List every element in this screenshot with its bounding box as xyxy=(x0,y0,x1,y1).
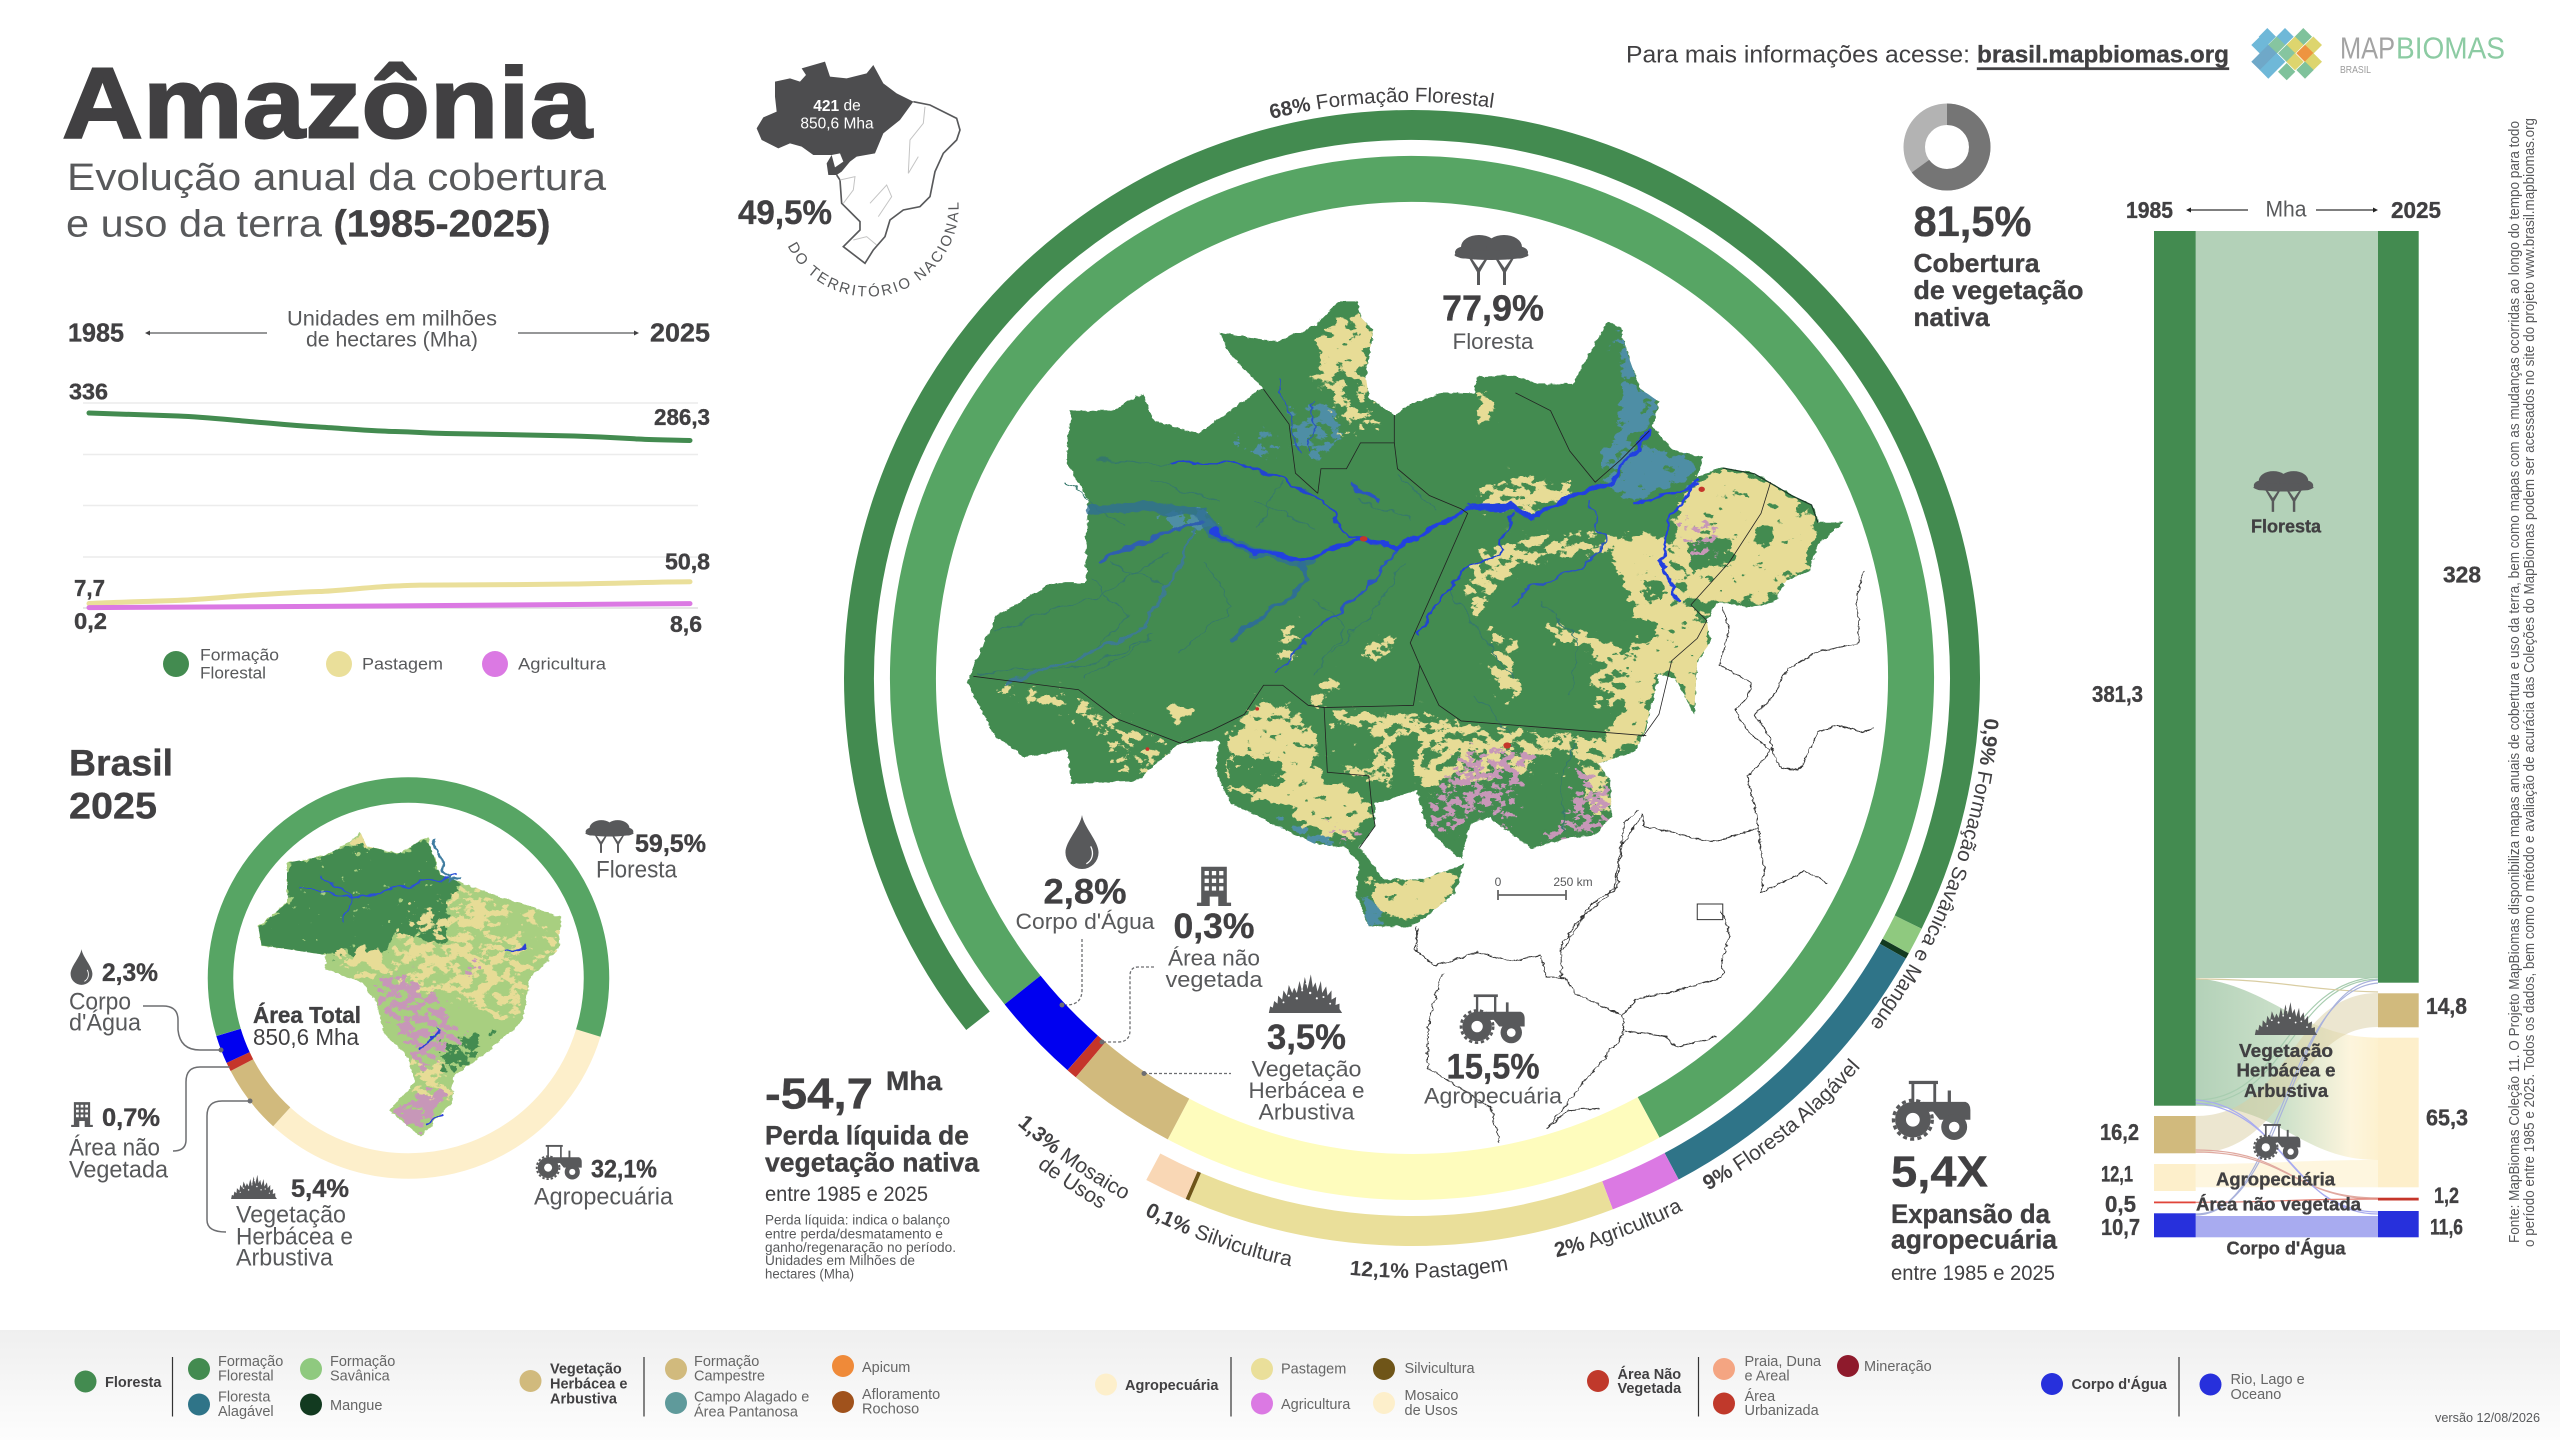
ring label: floresta alagável: 9% Floresta Alagável xyxy=(1703,1058,1860,1189)
urban spots xyxy=(1146,487,1705,751)
center label xyxy=(253,1001,361,1050)
title block xyxy=(62,48,607,246)
stat caption: de vegetação xyxy=(1914,275,2084,305)
legend group: área não vegetada: Mineração xyxy=(1864,1359,1932,1375)
callout: floresta xyxy=(585,820,706,884)
sankey 2025 bars xyxy=(2378,231,2419,1237)
legend group: vegetação herbácea: Formação xyxy=(694,1354,759,1370)
callout: vegetação herbácea: Herbácea e xyxy=(236,1224,353,1250)
callout: corpo d'água: d'Água xyxy=(69,1010,142,1036)
callout: perda líquida: Perda líquida de xyxy=(765,1120,969,1150)
callout: agropecuária: Agropecuária xyxy=(534,1184,674,1210)
callout: área não vegetada: Vegetada xyxy=(69,1156,169,1184)
legend group: área não vegetada: Urbanizada xyxy=(1744,1403,1820,1419)
legend group: vegetação herbácea: Herbácea e xyxy=(550,1376,627,1392)
sankey flow labels: Floresta xyxy=(2251,516,2322,536)
chart legend: Formação xyxy=(200,646,279,664)
map scale bar: 250 km xyxy=(1553,875,1593,889)
legend group: vegetação herbácea xyxy=(520,1354,940,1420)
MapBiomas logo xyxy=(2251,28,2505,80)
sankey values: 381,3 xyxy=(2092,681,2143,707)
legend group: floresta: Formação xyxy=(218,1354,283,1370)
chart value labels: 7,7 xyxy=(74,575,105,601)
Brazil donut ring xyxy=(143,712,674,1244)
chart value labels: 50,8 xyxy=(665,548,710,574)
sankey values: 16,2 xyxy=(2100,1119,2139,1145)
agriculture patches xyxy=(1321,518,1723,846)
legend group: área não vegetada: Área xyxy=(1744,1388,1776,1405)
callout: expansão agropecuária: 5,4X xyxy=(1891,1148,1988,1196)
sankey header xyxy=(2126,196,2441,223)
legend group: floresta: Formação xyxy=(330,1354,395,1370)
callout: floresta: Floresta xyxy=(596,856,678,884)
center stat: área não vegetada xyxy=(1100,867,1263,1044)
panel: Brasil 2025 xyxy=(69,712,706,1272)
chart value labels: 336 xyxy=(69,378,108,404)
sankey 1985 bars xyxy=(2154,231,2196,1237)
chart legend: Agricultura xyxy=(518,654,607,674)
center stat: vegetação herbácea xyxy=(1142,974,1364,1124)
sankey header: Mha xyxy=(2266,196,2307,222)
legend group: agropecuária: Agropecuária xyxy=(1125,1378,1219,1394)
chart value labels: 8,6 xyxy=(670,611,702,637)
remaining forest blocks xyxy=(1225,527,1774,835)
chart legend xyxy=(163,646,607,682)
center stat: área não vegetada: 0,3% xyxy=(1174,907,1254,946)
center stat: vegetação herbácea: Vegetação xyxy=(1252,1056,1362,1082)
outer ring: native vegetation classes xyxy=(635,0,2189,1440)
center stat: corpo d'água: 2,8% xyxy=(1044,872,1126,912)
chart header: 1985 xyxy=(68,318,124,348)
heading: Brasil xyxy=(69,742,173,784)
chart legend: Florestal xyxy=(200,664,266,682)
vertical source note: Fonte: MapBiomas Coleção 11. O Projeto MapBiomas disponibiliza mapas anuais de cobertura e uso da terra, bem como mapas com as mudanças ocorridas ao longo do tempo para todo xyxy=(2507,121,2523,1243)
callout: perda líquida: Perda líquida: indica o balanço xyxy=(765,1212,950,1228)
center stat: vegetação herbácea: 3,5% xyxy=(1267,1018,1346,1057)
panel: sankey 1985-2025 xyxy=(2092,196,2481,1258)
MapBiomas logo: MAP xyxy=(2340,30,2395,66)
center label: 850,6 Mha xyxy=(253,1024,359,1050)
panel: share of national territory: 850,6 Mha xyxy=(800,116,874,132)
sankey values: 0,5 xyxy=(2105,1191,2136,1217)
center stat: floresta: Floresta xyxy=(1452,329,1534,354)
center stat: agropecuária: 15,5% xyxy=(1446,1048,1540,1086)
callout: expansão agropecuária: agropecuária xyxy=(1891,1224,2058,1254)
callout: vegetação herbácea: Arbustiva xyxy=(236,1244,334,1272)
callout: área não vegetada: Área não xyxy=(69,1134,160,1162)
sankey flow labels: Arbustiva xyxy=(2244,1080,2329,1101)
chart legend: Pastagem xyxy=(362,654,443,674)
center stat: vegetação herbácea: Arbustiva xyxy=(1258,1100,1355,1124)
chart value labels: 286,3 xyxy=(654,404,710,430)
legend group: vegetação herbácea: Campo Alagado e xyxy=(694,1390,809,1406)
legend group: agropecuária: Mosaico xyxy=(1404,1388,1458,1404)
legend group: corpo d'água: Rio, Lago e xyxy=(2230,1372,2305,1388)
callout: agropecuária: 32,1% xyxy=(591,1156,657,1184)
legend group: vegetação herbácea: Área Pantanosa xyxy=(694,1404,799,1420)
callout: perda líquida: entre perda/desmatamento e xyxy=(765,1226,943,1242)
ring label: silvicultura: 0,1% Silvicultura xyxy=(1146,1204,1291,1266)
river network xyxy=(977,375,1697,830)
stat caption: Cobertura xyxy=(1914,248,2040,278)
heading: 2025 xyxy=(69,786,157,826)
sankey flow labels: Corpo d'Água xyxy=(2226,1238,2346,1258)
sankey values: 12,1 xyxy=(2101,1162,2133,1186)
line: agricultura xyxy=(89,604,690,608)
callout: área não vegetada: 0,7% xyxy=(102,1104,160,1132)
center stat: agropecuária xyxy=(1424,994,1563,1108)
curved label: DO TERRITÓRIO NACIONAL xyxy=(788,202,959,296)
center stat: floresta xyxy=(1442,235,1544,354)
donut icon xyxy=(1914,114,1980,180)
ring label: formação florestal: 68% Formação Florestal xyxy=(1270,87,1494,118)
Brazil land cover map xyxy=(255,832,561,1137)
legend group: floresta: Florestal xyxy=(218,1368,274,1384)
legend group: floresta: Floresta xyxy=(105,1375,162,1391)
header link: brasil.mapbiomas.org xyxy=(1977,42,2229,68)
Amazon biome land cover map xyxy=(967,301,1844,926)
callout: perda líquida: Unidades em Milhões de xyxy=(765,1253,915,1268)
chart header: de hectares (Mha) xyxy=(306,328,478,352)
legend group: floresta: Floresta xyxy=(218,1390,271,1406)
callout: perda líquida: vegetação nativa xyxy=(765,1148,980,1178)
panel: central donut xyxy=(844,87,1998,1280)
sankey values: 328 xyxy=(2443,562,2481,588)
sankey values: 10,7 xyxy=(2101,1214,2140,1240)
sankey flow labels xyxy=(2196,471,2362,1259)
legend group: agropecuária: Pastagem xyxy=(1281,1362,1346,1378)
sankey flows xyxy=(2196,231,2378,1237)
state borders xyxy=(973,389,1771,848)
callout: corpo d'água xyxy=(69,949,224,1052)
callout: agropecuária xyxy=(534,1145,674,1210)
legend group: vegetação herbácea: Campestre xyxy=(694,1368,765,1384)
chart header: Unidades em milhões xyxy=(287,308,497,330)
vertical source note: o período entre 1985 e 2025. Todos os dados, bem como o método e avaliação de acurácia das Coleções do MapBiomas podem ser acessados no site do projeto www.brasil.mapbiomas.org xyxy=(2522,118,2538,1247)
version note: versão 12/08/2026 xyxy=(2435,1410,2540,1425)
legend group: área não vegetada: Área Não xyxy=(1618,1366,1681,1383)
legend group: área não vegetada: Vegetada xyxy=(1618,1381,1682,1397)
callout: vegetação herbácea: Vegetação xyxy=(236,1202,346,1228)
subtitle line 2: e uso da terra xyxy=(66,204,323,246)
legend group: vegetação herbácea: Apicum xyxy=(862,1360,910,1376)
center stat: corpo d'água: Corpo d'Água xyxy=(1016,909,1155,934)
line: formação florestal xyxy=(89,413,690,440)
stat caption: nativa xyxy=(1914,302,1990,332)
sankey flow labels: Herbácea e xyxy=(2236,1060,2336,1080)
legend group: vegetação herbácea: Arbustiva xyxy=(550,1392,618,1408)
legend group: corpo d'água xyxy=(2041,1372,2305,1403)
MapBiomas logo: BIOMAS xyxy=(2396,30,2505,66)
panel: share of national territory xyxy=(738,62,961,296)
vertical source note xyxy=(2507,118,2538,1247)
panel: bottom legend xyxy=(0,1330,2560,1440)
legend group: corpo d'água: Corpo d'Água xyxy=(2072,1376,2168,1393)
heading xyxy=(69,742,173,826)
sankey values: 1,2 xyxy=(2434,1183,2459,1208)
header link: Para mais informações acesse: xyxy=(1626,42,1970,68)
sankey flow labels: Vegetação xyxy=(2239,1040,2333,1061)
legend group: vegetação herbácea: Vegetação xyxy=(550,1362,622,1378)
callout: corpo d'água: Corpo xyxy=(69,988,131,1016)
title: Amazônia xyxy=(62,48,594,160)
center stat: área não vegetada: Área não xyxy=(1168,946,1260,970)
sankey values: 65,3 xyxy=(2426,1104,2468,1130)
callout: expansão agropecuária xyxy=(1891,1081,2058,1285)
dark coastline fringe xyxy=(1723,467,1818,522)
legend group: área não vegetada xyxy=(1587,1354,1932,1419)
pasture patches xyxy=(983,310,1818,920)
ring label: de usos: de Usos xyxy=(1039,1160,1105,1208)
legend group: agropecuária: Agricultura xyxy=(1281,1397,1351,1413)
legend group: corpo d'água: Oceano xyxy=(2230,1387,2281,1403)
center stat: corpo d'água xyxy=(1016,815,1155,1008)
ring label: pastagem: 12,1% Pastagem xyxy=(1350,1259,1508,1280)
callout: perda líquida: -54,7 xyxy=(765,1070,873,1118)
center stat: área não vegetada: vegetada xyxy=(1166,967,1263,992)
legend group: agropecuária: de Usos xyxy=(1404,1403,1458,1419)
callout: perda líquida: Mha xyxy=(886,1066,943,1096)
center stat: vegetação herbácea: Herbácea e xyxy=(1248,1078,1364,1103)
legend group: área não vegetada: Praia, Duna xyxy=(1744,1354,1822,1370)
legend group: vegetação herbácea: Rochoso xyxy=(862,1402,919,1418)
stat 49,5%: 49,5% xyxy=(738,194,832,232)
ring label: savânica e mangue: 0,9% Formação Savânica e Mangue xyxy=(1872,719,1998,1028)
callout: vegetação herbácea xyxy=(207,1098,353,1272)
MapBiomas logo: BRASIL xyxy=(2340,64,2371,76)
flooded forest zones xyxy=(1142,326,1697,926)
chart value labels: 0,2 xyxy=(74,608,107,634)
chart value labels xyxy=(69,378,710,637)
callout: expansão agropecuária: Expansão da xyxy=(1891,1199,2051,1229)
legend group: floresta: Mangue xyxy=(330,1398,382,1414)
neighbouring state outlines xyxy=(1414,571,1873,1143)
sankey header: 2025 xyxy=(2391,197,2441,223)
callout: corpo d'água: 2,3% xyxy=(102,959,158,987)
chart header xyxy=(68,308,710,352)
legend group: floresta: Savânica xyxy=(330,1368,391,1384)
callout: perda líquida: hectares (Mha) xyxy=(765,1266,854,1282)
legend group: floresta: Alagável xyxy=(218,1404,274,1420)
sankey header: 1985 xyxy=(2126,197,2173,223)
stat caption xyxy=(1914,248,2084,332)
callout: área não vegetada xyxy=(69,1067,230,1184)
legend group: área não vegetada: e Areal xyxy=(1744,1368,1790,1384)
sankey flow labels: Agropecuária xyxy=(2216,1168,2336,1190)
map scale bar xyxy=(1495,875,1593,900)
map scale bar: 0 xyxy=(1495,875,1502,889)
legend group: vegetação herbácea: Afloramento xyxy=(862,1387,940,1403)
panel: native vegetation stat xyxy=(1914,114,2084,332)
callout: floresta: 59,5% xyxy=(635,830,706,858)
mini map label: 421 de xyxy=(813,98,861,114)
center label: Área Total xyxy=(253,1001,361,1028)
subtitle line 1: Evolução anual da cobertura xyxy=(67,157,607,199)
sankey values: 14,8 xyxy=(2426,993,2467,1019)
callout: perda líquida: entre 1985 e 2025 xyxy=(765,1183,928,1206)
ring label: agricultura: 2% Agricultura xyxy=(1554,1202,1684,1258)
sankey values: 11,6 xyxy=(2430,1214,2463,1240)
inner ring: main classes xyxy=(708,0,2116,1382)
subtitle years: (1985-2025) xyxy=(334,204,550,246)
callout: expansão agropecuária: entre 1985 e 2025 xyxy=(1891,1262,2055,1285)
center stat: floresta: 77,9% xyxy=(1442,288,1544,328)
sankey values xyxy=(2092,562,2481,1240)
mini Brazil outline xyxy=(757,62,960,263)
ring label: mosaico: 1,3% Mosaico xyxy=(1018,1116,1128,1198)
callout: vegetação herbácea: 5,4% xyxy=(291,1175,349,1203)
line: pastagem xyxy=(89,582,690,604)
stat value: 81,5% xyxy=(1914,198,2032,246)
header link xyxy=(1626,42,2229,68)
legend group: floresta xyxy=(74,1354,395,1420)
sankey flow labels: Área não vegetada xyxy=(2196,1194,2362,1214)
legend group: agropecuária: Silvicultura xyxy=(1404,1361,1476,1377)
chart header: 2025 xyxy=(650,318,710,348)
legend group: agropecuária xyxy=(1095,1358,1476,1419)
center stat: agropecuária: Agropecuária xyxy=(1424,1084,1563,1108)
panel: line chart 1985-2025 xyxy=(68,308,710,682)
callout: perda líquida xyxy=(765,1066,980,1282)
callout: perda líquida: ganho/regenaração no período. xyxy=(765,1240,956,1255)
